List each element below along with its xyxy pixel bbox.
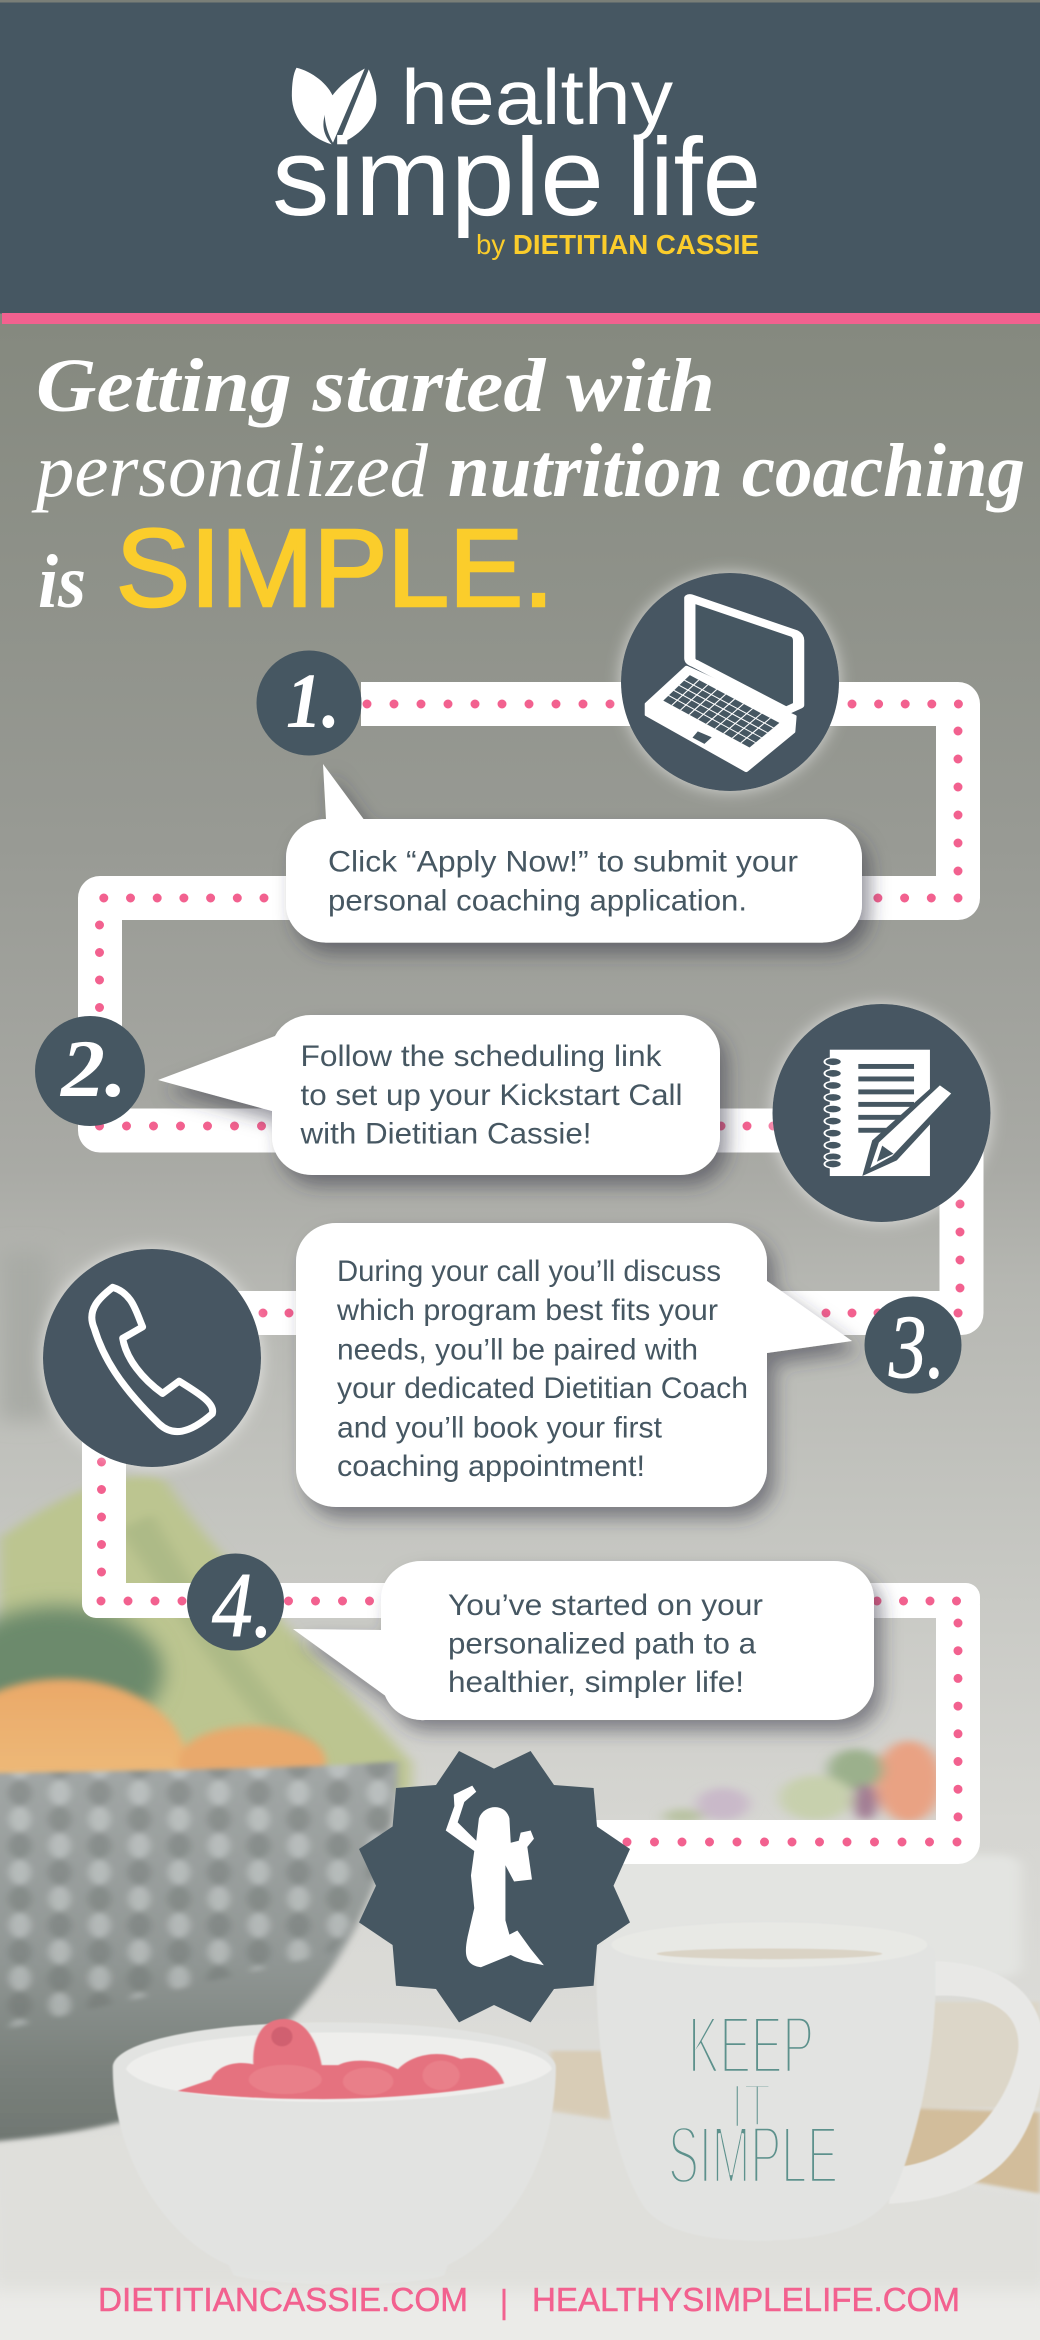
wordmark: simple life: simple (272, 116, 604, 239)
bottom haze (0, 2290, 1040, 2340)
title line 2 bold: nutrition coaching (448, 429, 1025, 513)
panel: step 1 speech bubble (286, 764, 862, 943)
title line 3 is: is (38, 540, 86, 624)
logo (272, 53, 761, 260)
salad bowl behind path (597, 1741, 1021, 1977)
step 3 text: and you’ll book your first (337, 1412, 663, 1444)
oranges (0, 1679, 326, 1851)
wooden board (551, 2002, 1040, 2194)
step 3 text (336, 1255, 748, 1483)
icon: starburst with jumping person (359, 1751, 630, 2022)
badge: number 3: 3. (888, 1298, 945, 1397)
icon: leaf (292, 68, 376, 144)
coffee mug (596, 1920, 1040, 2241)
step 4 text: personalized path to a (448, 1628, 756, 1660)
path: pink dots (100, 704, 960, 1842)
step 3 text: During your call you’ll discuss (337, 1255, 721, 1288)
footer website links (98, 2281, 960, 2320)
pink divider (2, 313, 1040, 324)
footer website links: | (500, 2283, 508, 2320)
step 4 text: You’ve started on your (448, 1589, 763, 1622)
badge: number 3 (864, 1296, 962, 1397)
step 1 text: personal coaching application. (328, 884, 747, 918)
icon: notebook and pencil (772, 1004, 990, 1222)
step 3 text: needs, you’ll be paired with (337, 1334, 698, 1366)
icon: laptop (621, 573, 839, 791)
badge: number 4: 4. (212, 1554, 273, 1656)
step 2 text: Follow the scheduling link (300, 1040, 663, 1073)
badge: number 2 (35, 1016, 145, 1126)
raspberries (178, 2019, 504, 2099)
bananas (0, 1476, 411, 1791)
step 3 text: which program best fits your (336, 1294, 718, 1327)
wordmark: simple life: life (627, 116, 761, 239)
wordmark: healthy: healthy (401, 53, 673, 141)
title line 1: Getting started with (36, 344, 715, 428)
step 4 text: healthier, simpler life! (448, 1666, 744, 1699)
table surface (0, 2112, 1040, 2340)
path: white winding band (82, 704, 980, 1842)
badge: number 2: 2. (60, 1023, 127, 1114)
icon: telephone handset (43, 1249, 261, 1467)
metal fruit bowl (0, 1761, 398, 2143)
step 4 text (448, 1589, 763, 1699)
title SIMPLE: SIMPLE. (116, 507, 554, 630)
footer website links: DIETITIANCASSIE.COM (98, 2281, 468, 2318)
step 2 text: with Dietitian Cassie! (299, 1118, 592, 1150)
step 3 text: your dedicated Dietitian Coach (337, 1372, 748, 1405)
step 1 text (328, 846, 798, 918)
title line 2 light: personalized (31, 429, 429, 513)
step 3 text: coaching appointment! (337, 1450, 645, 1483)
mug lettering (668, 2000, 838, 2201)
mug lettering: IT (731, 2070, 771, 2142)
blurred fixture at left edge (0, 1250, 50, 1420)
wordmark: simple life (272, 116, 761, 239)
panel: step 3 speech bubble (296, 1223, 852, 1507)
avocado (0, 1606, 163, 1738)
badge: number 1: 1. (286, 657, 340, 744)
byline: by DIETITIAN CASSIE (476, 229, 759, 260)
jumping person silhouette (446, 1786, 544, 1967)
title (31, 344, 1025, 630)
white cereal bowl (113, 2022, 556, 2284)
mug lettering: KEEP (688, 2000, 814, 2091)
step 1 text: Click “Apply Now!” to submit your (328, 846, 798, 878)
badge: number 1 (256, 650, 362, 756)
footer website links: HEALTHYSIMPLELIFE.COM (532, 2281, 960, 2318)
header banner (0, 0, 1040, 324)
mug lettering: SIMPLE (668, 2110, 838, 2201)
panel: step 4 speech bubble (293, 1561, 874, 1720)
step 2 text: to set up your Kickstart Call (300, 1079, 682, 1112)
step 2 text (299, 1040, 682, 1150)
panel: step 2 speech bubble (158, 1015, 720, 1175)
